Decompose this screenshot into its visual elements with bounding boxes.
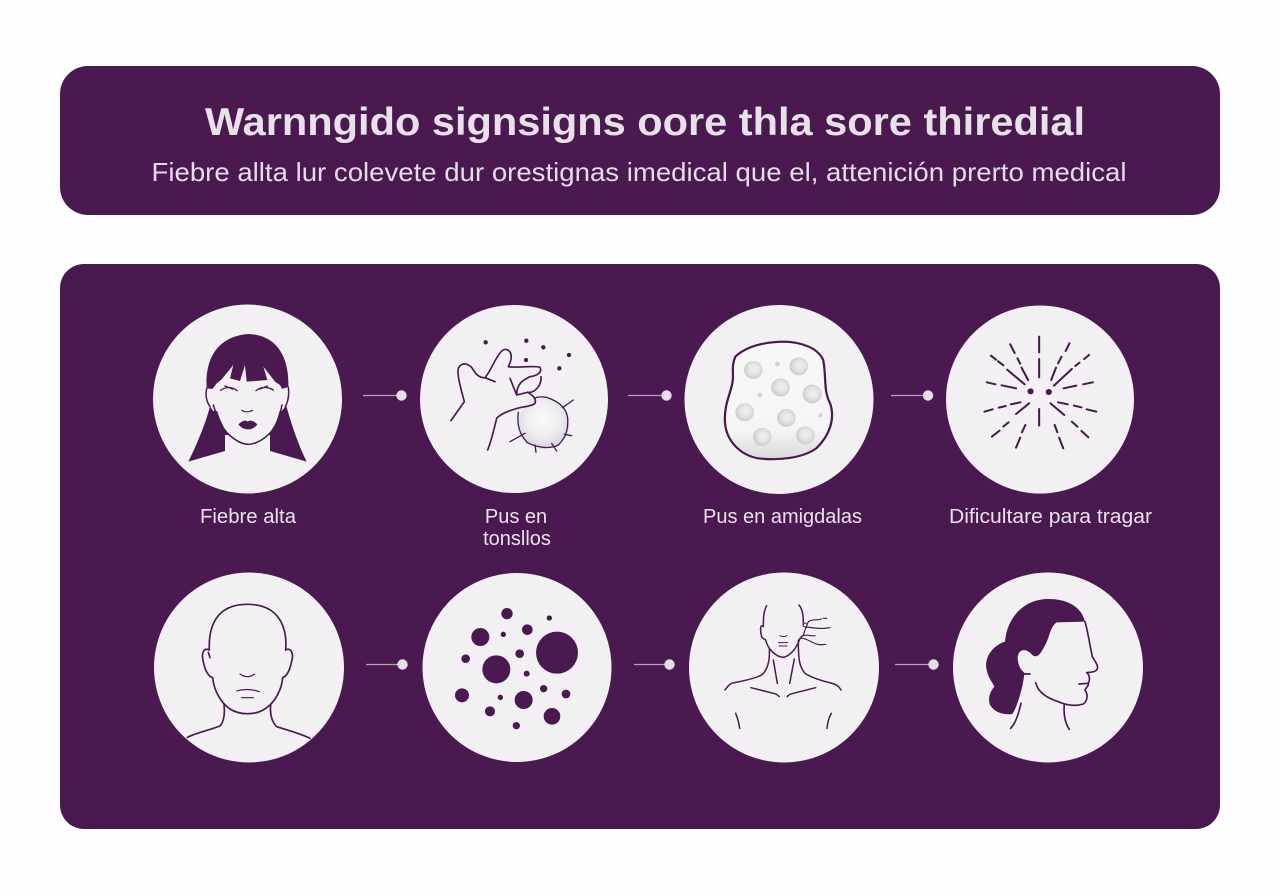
icon: woman's face with fever	[153, 304, 342, 494]
title: Warnngido signsigns oore thla sore thiredial	[205, 101, 1085, 144]
header panel	[60, 66, 1220, 215]
connector	[891, 390, 933, 401]
panel: warning signs grid	[60, 264, 1220, 829]
label: Pus en tonsllos: tonsllos	[483, 528, 551, 550]
icon: hand and pus ball	[420, 305, 608, 493]
label: Fiebre alta: Fiebre alta	[200, 506, 297, 528]
connector	[895, 659, 939, 670]
connector	[634, 659, 675, 670]
connector	[363, 390, 407, 401]
connector	[628, 390, 672, 401]
icon: tonsil with pus spots	[684, 305, 874, 494]
icon: bald head and shoulders	[154, 572, 344, 762]
icon: woman's profile with hair bun	[953, 572, 1143, 762]
label: Pus en amigdalas: Pus en amigdalas	[703, 506, 862, 528]
icon: neck and shoulders with radiating ear pain	[689, 572, 879, 762]
subtitle: Fiebre allta lur colevete dur orestignas imedical que el, attenición prerto medical	[152, 157, 1126, 187]
icon: radiating pain dashes	[946, 306, 1134, 494]
label: Dificultare para tragar: Dificultare para tragar	[949, 506, 1152, 528]
label: Pus en tonsllos: Pus en	[485, 506, 547, 528]
icon: rash spots	[422, 573, 612, 762]
connector	[366, 659, 408, 670]
